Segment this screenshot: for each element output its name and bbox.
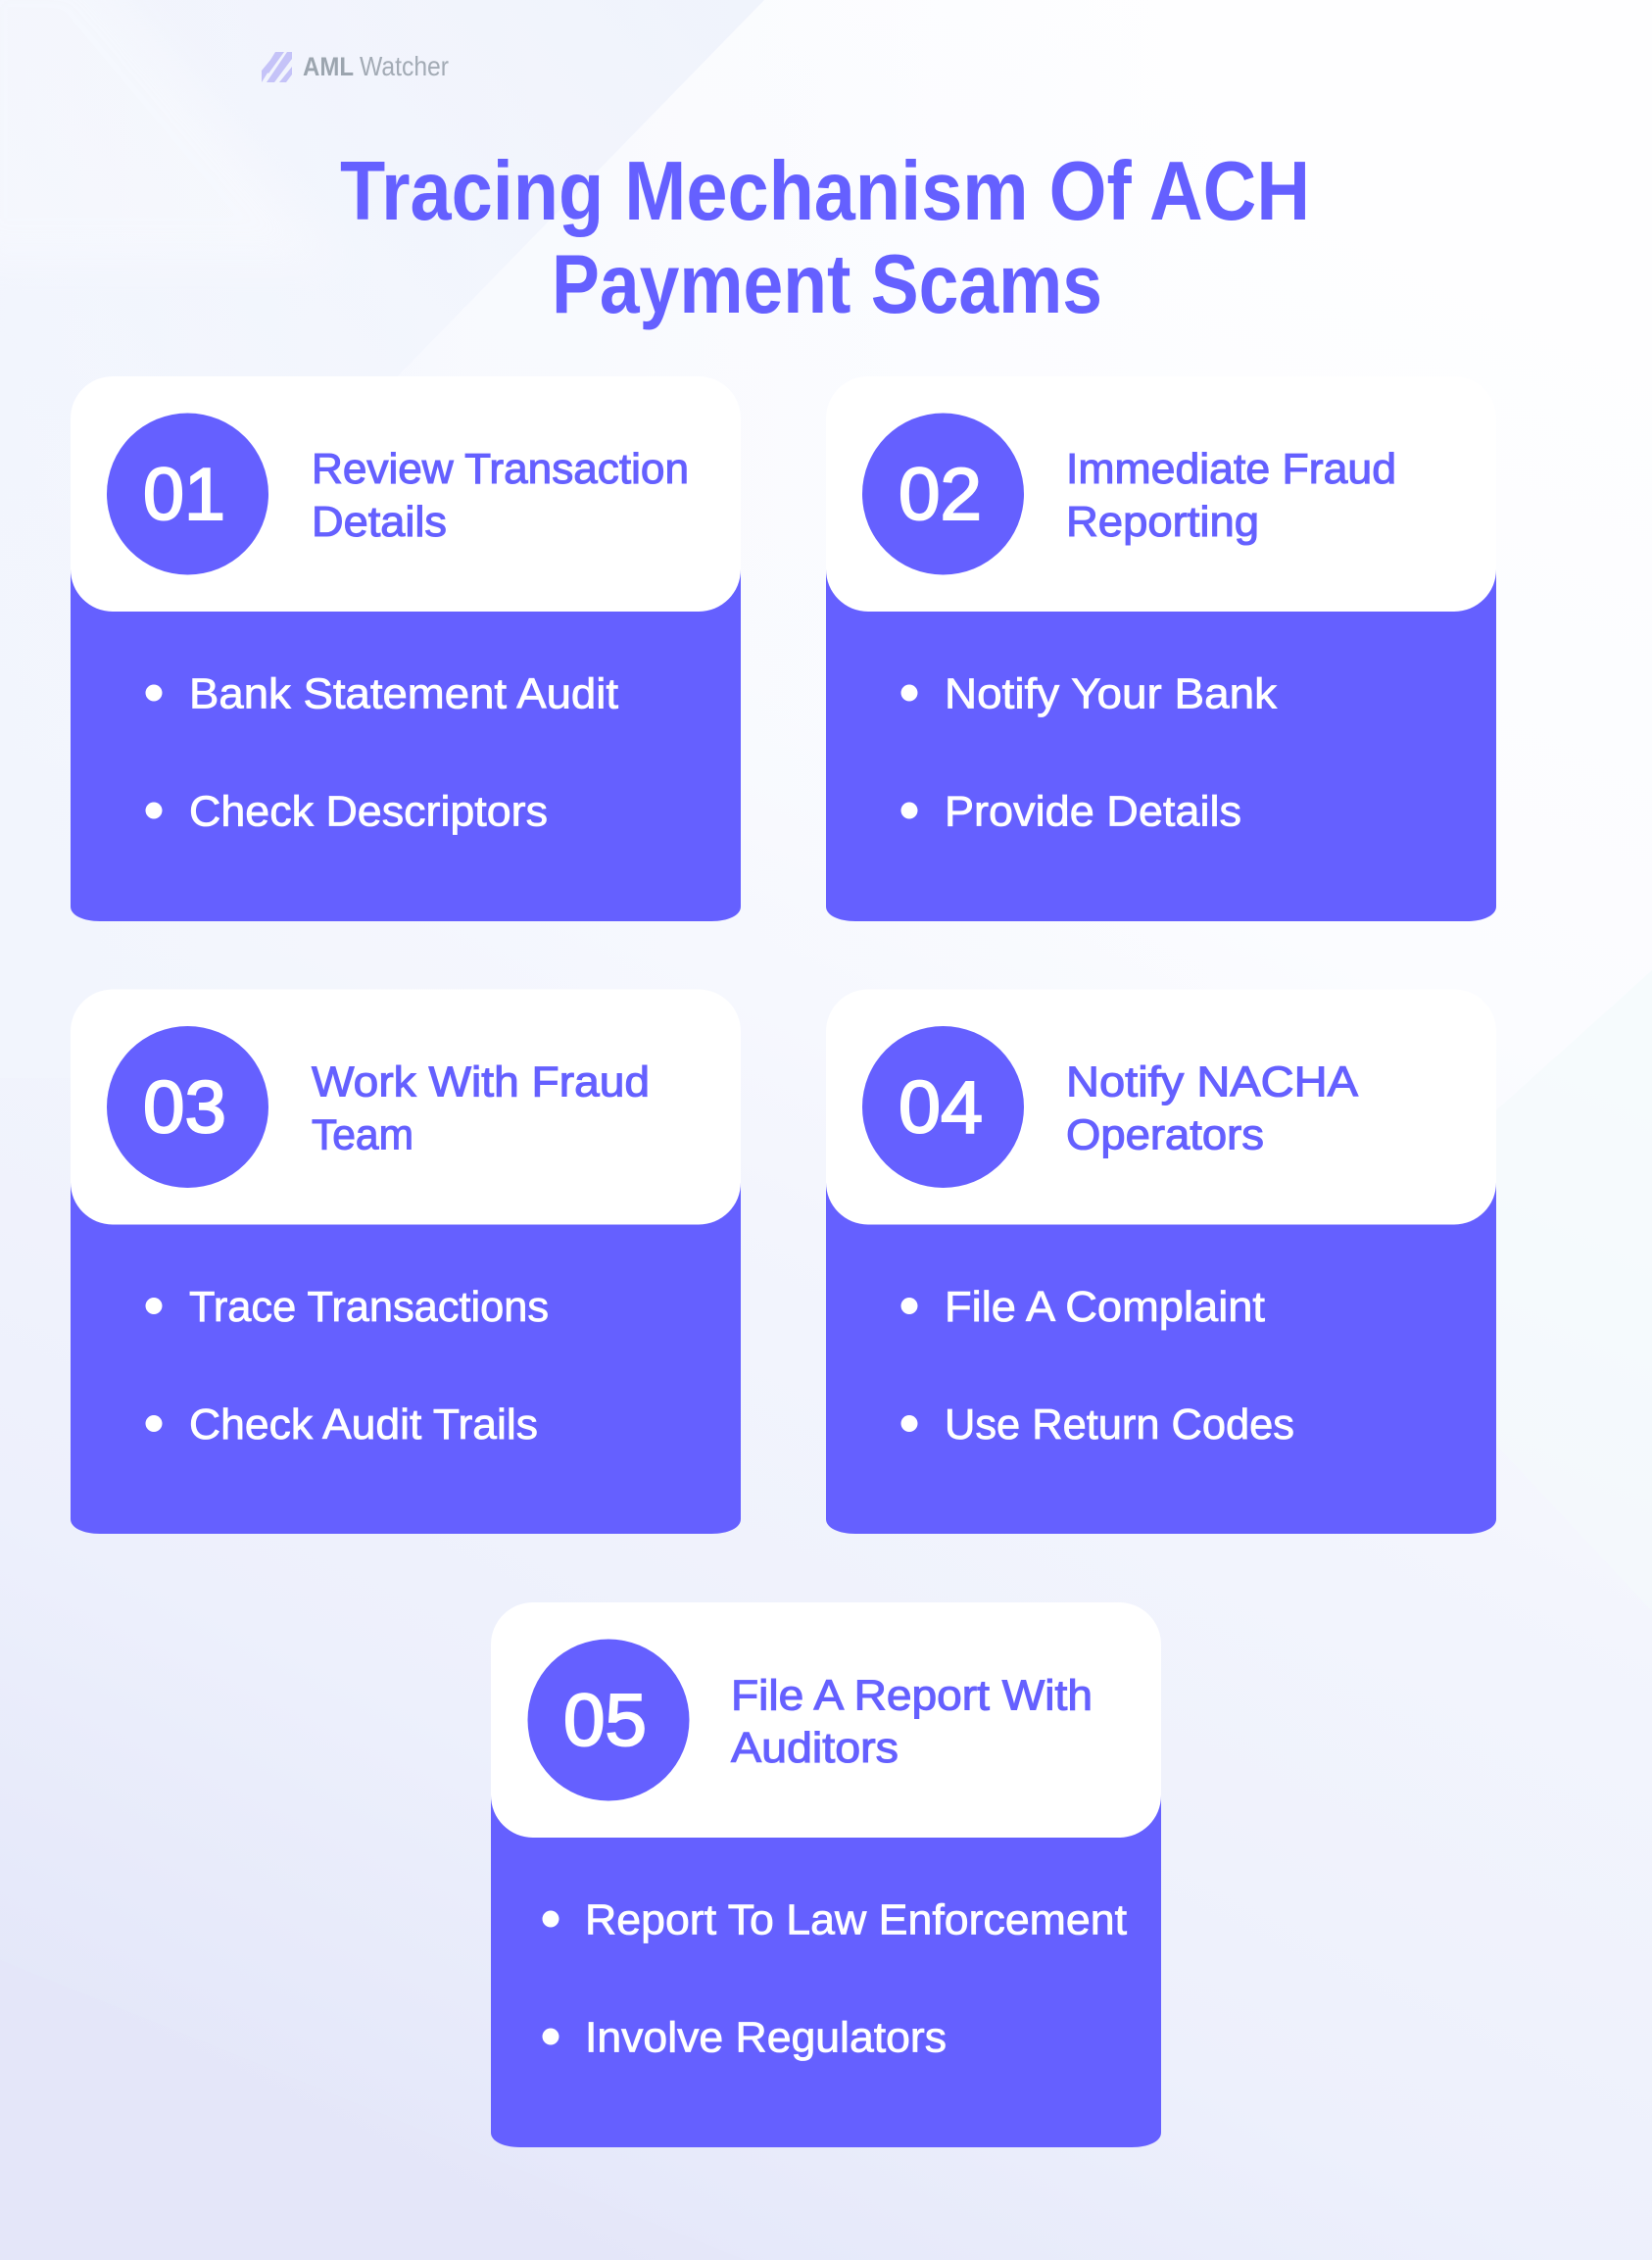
heading: Work With Fraud Team (312, 1058, 650, 1158)
bullet list: Trace Transactions (189, 1283, 549, 1331)
heading: Notify NACHA Operators: Notify NACHA (1066, 1058, 1359, 1105)
bullet list: File A Complaint (945, 1283, 1265, 1331)
step number 02: 02 (899, 453, 982, 535)
heading: Review Transaction Details (312, 445, 689, 546)
panel: step 04 (826, 990, 1496, 1534)
heading: Immediate Fraud Reporting: Reporting (1066, 498, 1259, 546)
logo: AML Watcher: Watcher (360, 51, 449, 81)
step number 01: 01 (143, 453, 225, 535)
bullet list: Check Descriptors (189, 788, 548, 835)
logo: AML Watcher: AML (303, 52, 354, 81)
heading: Work With Fraud Team: Work With Fraud (312, 1058, 650, 1105)
bullet list: Notify Your Bank (945, 670, 1278, 717)
bullet list (543, 1895, 1127, 2062)
logo: AML Watcher (262, 51, 449, 82)
heading: Review Transaction Details: Details (312, 498, 447, 546)
heading: File A Report With Auditors: File A Report With (731, 1672, 1093, 1719)
title: Tracing Mechanism Of ACH (340, 145, 1310, 238)
step number 05 (527, 1639, 690, 1801)
bullet list (145, 670, 618, 835)
step number 01 (107, 414, 268, 574)
icon: striped logo mark (262, 52, 292, 82)
step number 02 (862, 414, 1024, 574)
step number 04 (862, 1026, 1024, 1188)
heading: Work With Fraud Team: Team (312, 1111, 413, 1158)
bullet list (901, 670, 1278, 835)
panel: step 03 (71, 990, 741, 1534)
panel: step 01 (71, 376, 741, 921)
heading: Immediate Fraud Reporting (1066, 445, 1396, 546)
bullet list: Provide Details (945, 788, 1241, 835)
bullet list: Involve Regulators (585, 2013, 947, 2062)
heading: Notify NACHA Operators (1066, 1058, 1359, 1158)
bullet list (901, 1283, 1294, 1449)
heading: Notify NACHA Operators: Operators (1066, 1111, 1264, 1158)
bullet list: Bank Statement Audit (189, 670, 618, 717)
heading: File A Report With Auditors: Auditors (731, 1724, 899, 1772)
panel: step 02 (826, 376, 1496, 921)
bullet list: Use Return Codes (945, 1400, 1294, 1449)
step number 03: 03 (143, 1066, 226, 1149)
step number 03 (107, 1026, 268, 1188)
bullet list: Report To Law Enforcement (585, 1895, 1127, 1944)
panel: step 05 (491, 1602, 1161, 2147)
heading: Immediate Fraud Reporting: Immediate Fraud (1066, 445, 1396, 493)
heading: Review Transaction Details: Review Transaction (312, 445, 689, 493)
heading: File A Report With Auditors (731, 1672, 1093, 1772)
title (340, 145, 1310, 331)
bullet list (145, 1283, 549, 1449)
step number 04: 04 (899, 1066, 983, 1149)
step number 05: 05 (563, 1679, 647, 1761)
bullet list: Check Audit Trails (189, 1400, 538, 1449)
title: Payment Scams (552, 238, 1102, 331)
